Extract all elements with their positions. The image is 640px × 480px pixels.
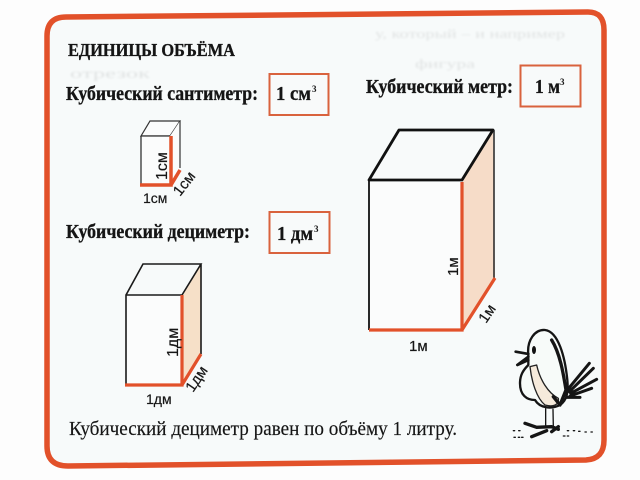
heading: cubic centimetre: Кубический сантиметр: xyxy=(66,83,258,105)
bird belly xyxy=(530,365,558,406)
bird body xyxy=(520,330,568,408)
cube: cubic centimetre: 1см xyxy=(143,190,167,206)
bottom note: Кубический дециметр равен по объёму 1 литру. xyxy=(69,418,457,440)
cube: cubic decimetre: 1дм xyxy=(182,363,212,395)
bird eye xyxy=(532,346,536,354)
unit box: 1 m3: 3 xyxy=(560,77,565,87)
unit box: 1 dm3 xyxy=(270,212,330,253)
unit box: 1 cm3: 1 см xyxy=(276,83,311,105)
cube: cubic centimetre: 1см xyxy=(154,152,171,180)
bird legs xyxy=(546,409,553,427)
cube: cubic metre: 1м xyxy=(445,257,462,276)
cube: cubic metre xyxy=(369,130,500,355)
cube: cubic metre: 1м xyxy=(475,301,500,326)
unit box: 1 cm3: 3 xyxy=(312,84,317,94)
title: ЕДИНИЦЫ ОБЪЁМА xyxy=(68,40,235,60)
text: отрезок xyxy=(70,67,150,82)
ground dots xyxy=(513,431,592,437)
cube: cubic decimetre: 1дм xyxy=(165,328,182,357)
cube: cubic centimetre: 1см xyxy=(170,168,199,199)
bird beak xyxy=(516,352,528,365)
cube: cubic decimetre xyxy=(125,264,212,407)
heading: cubic metre: Кубический метр: xyxy=(366,76,513,98)
unit box: 1 dm3: 3 xyxy=(314,224,319,234)
unit box: 1 cm3 xyxy=(270,74,328,115)
cube: cubic metre: 1м xyxy=(409,338,428,355)
text: у, который – и например xyxy=(375,26,565,41)
unit box: 1 dm3: 1 дм xyxy=(277,223,313,245)
icon: bird xyxy=(513,330,597,437)
unit box: 1 m3: 1 м xyxy=(535,76,560,98)
text: фигура xyxy=(415,56,475,71)
cube: cubic centimetre xyxy=(140,121,199,206)
bird tail xyxy=(566,363,597,397)
bird wing stripe xyxy=(552,340,566,405)
cube: cubic decimetre: 1дм xyxy=(146,391,172,407)
unit box: 1 m3 xyxy=(520,66,580,106)
bird feet xyxy=(525,423,558,437)
heading: cubic decimetre: Кубический дециметр: xyxy=(66,221,250,243)
